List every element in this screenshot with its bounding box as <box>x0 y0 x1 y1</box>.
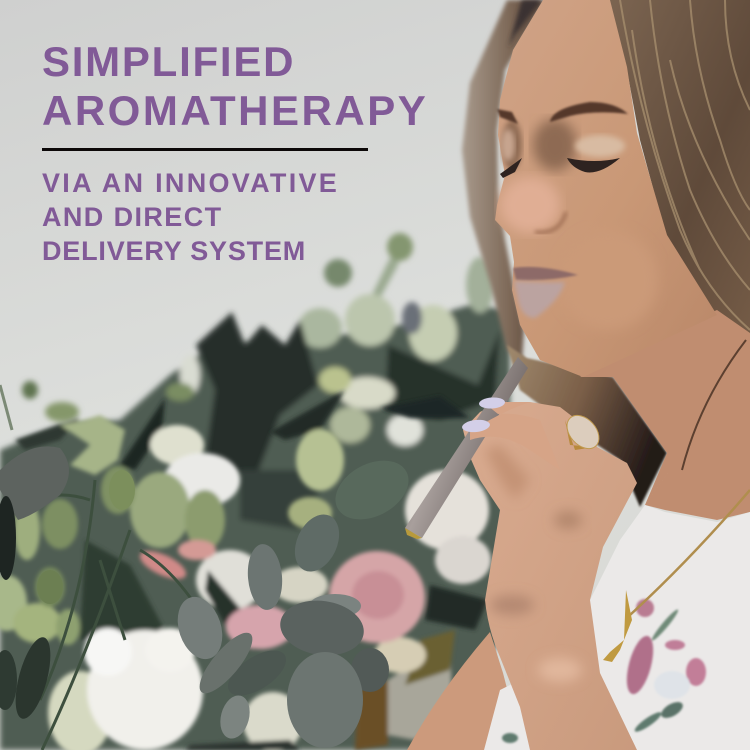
subheading: delivery system <box>42 168 339 266</box>
face <box>495 0 717 377</box>
necklace chain <box>630 490 750 615</box>
necklace pendant <box>603 590 632 662</box>
lips <box>513 267 578 280</box>
closed eye <box>567 158 620 172</box>
divider rule <box>42 148 368 151</box>
neck and chest <box>580 310 750 520</box>
hair behind the neck <box>507 345 667 507</box>
hair: light strands on right <box>620 0 750 330</box>
far closed eye <box>500 158 522 178</box>
neck cord <box>682 340 746 470</box>
gemstone ring <box>561 409 605 455</box>
midground flowers and leaves <box>0 390 491 750</box>
shirt <box>484 470 750 750</box>
subheading: delivery system: VIA AN INNOVATIVE <box>42 168 339 198</box>
shirt floral print <box>502 599 706 743</box>
eucalyptus leaves <box>0 446 419 748</box>
far eyebrow <box>497 109 518 124</box>
heading: simplified aromatherapy: AROMATHERAPY <box>42 87 428 134</box>
hand and forearm <box>463 402 637 750</box>
aromatherapy pen <box>405 357 528 539</box>
dark hair band <box>508 0 541 48</box>
hair: left strands <box>462 0 545 362</box>
subheading: delivery system: DELIVERY SYSTEM <box>42 236 306 266</box>
face shading <box>500 119 658 330</box>
hand shading <box>485 445 582 682</box>
heading: simplified aromatherapy <box>42 38 428 134</box>
woman <box>405 0 750 750</box>
fingers over pen <box>470 402 560 470</box>
subheading: delivery system: AND DIRECT <box>42 202 222 232</box>
background blurred flowers <box>0 233 510 750</box>
stems <box>0 385 205 750</box>
eyebrow <box>550 102 628 122</box>
hair: right side <box>600 0 750 345</box>
heading: simplified aromatherapy: SIMPLIFIED <box>42 38 295 85</box>
forearm behind <box>407 632 523 750</box>
nail: middle finger <box>461 419 491 433</box>
lower lip and vapour <box>514 281 565 318</box>
nail: index finger <box>479 397 505 409</box>
